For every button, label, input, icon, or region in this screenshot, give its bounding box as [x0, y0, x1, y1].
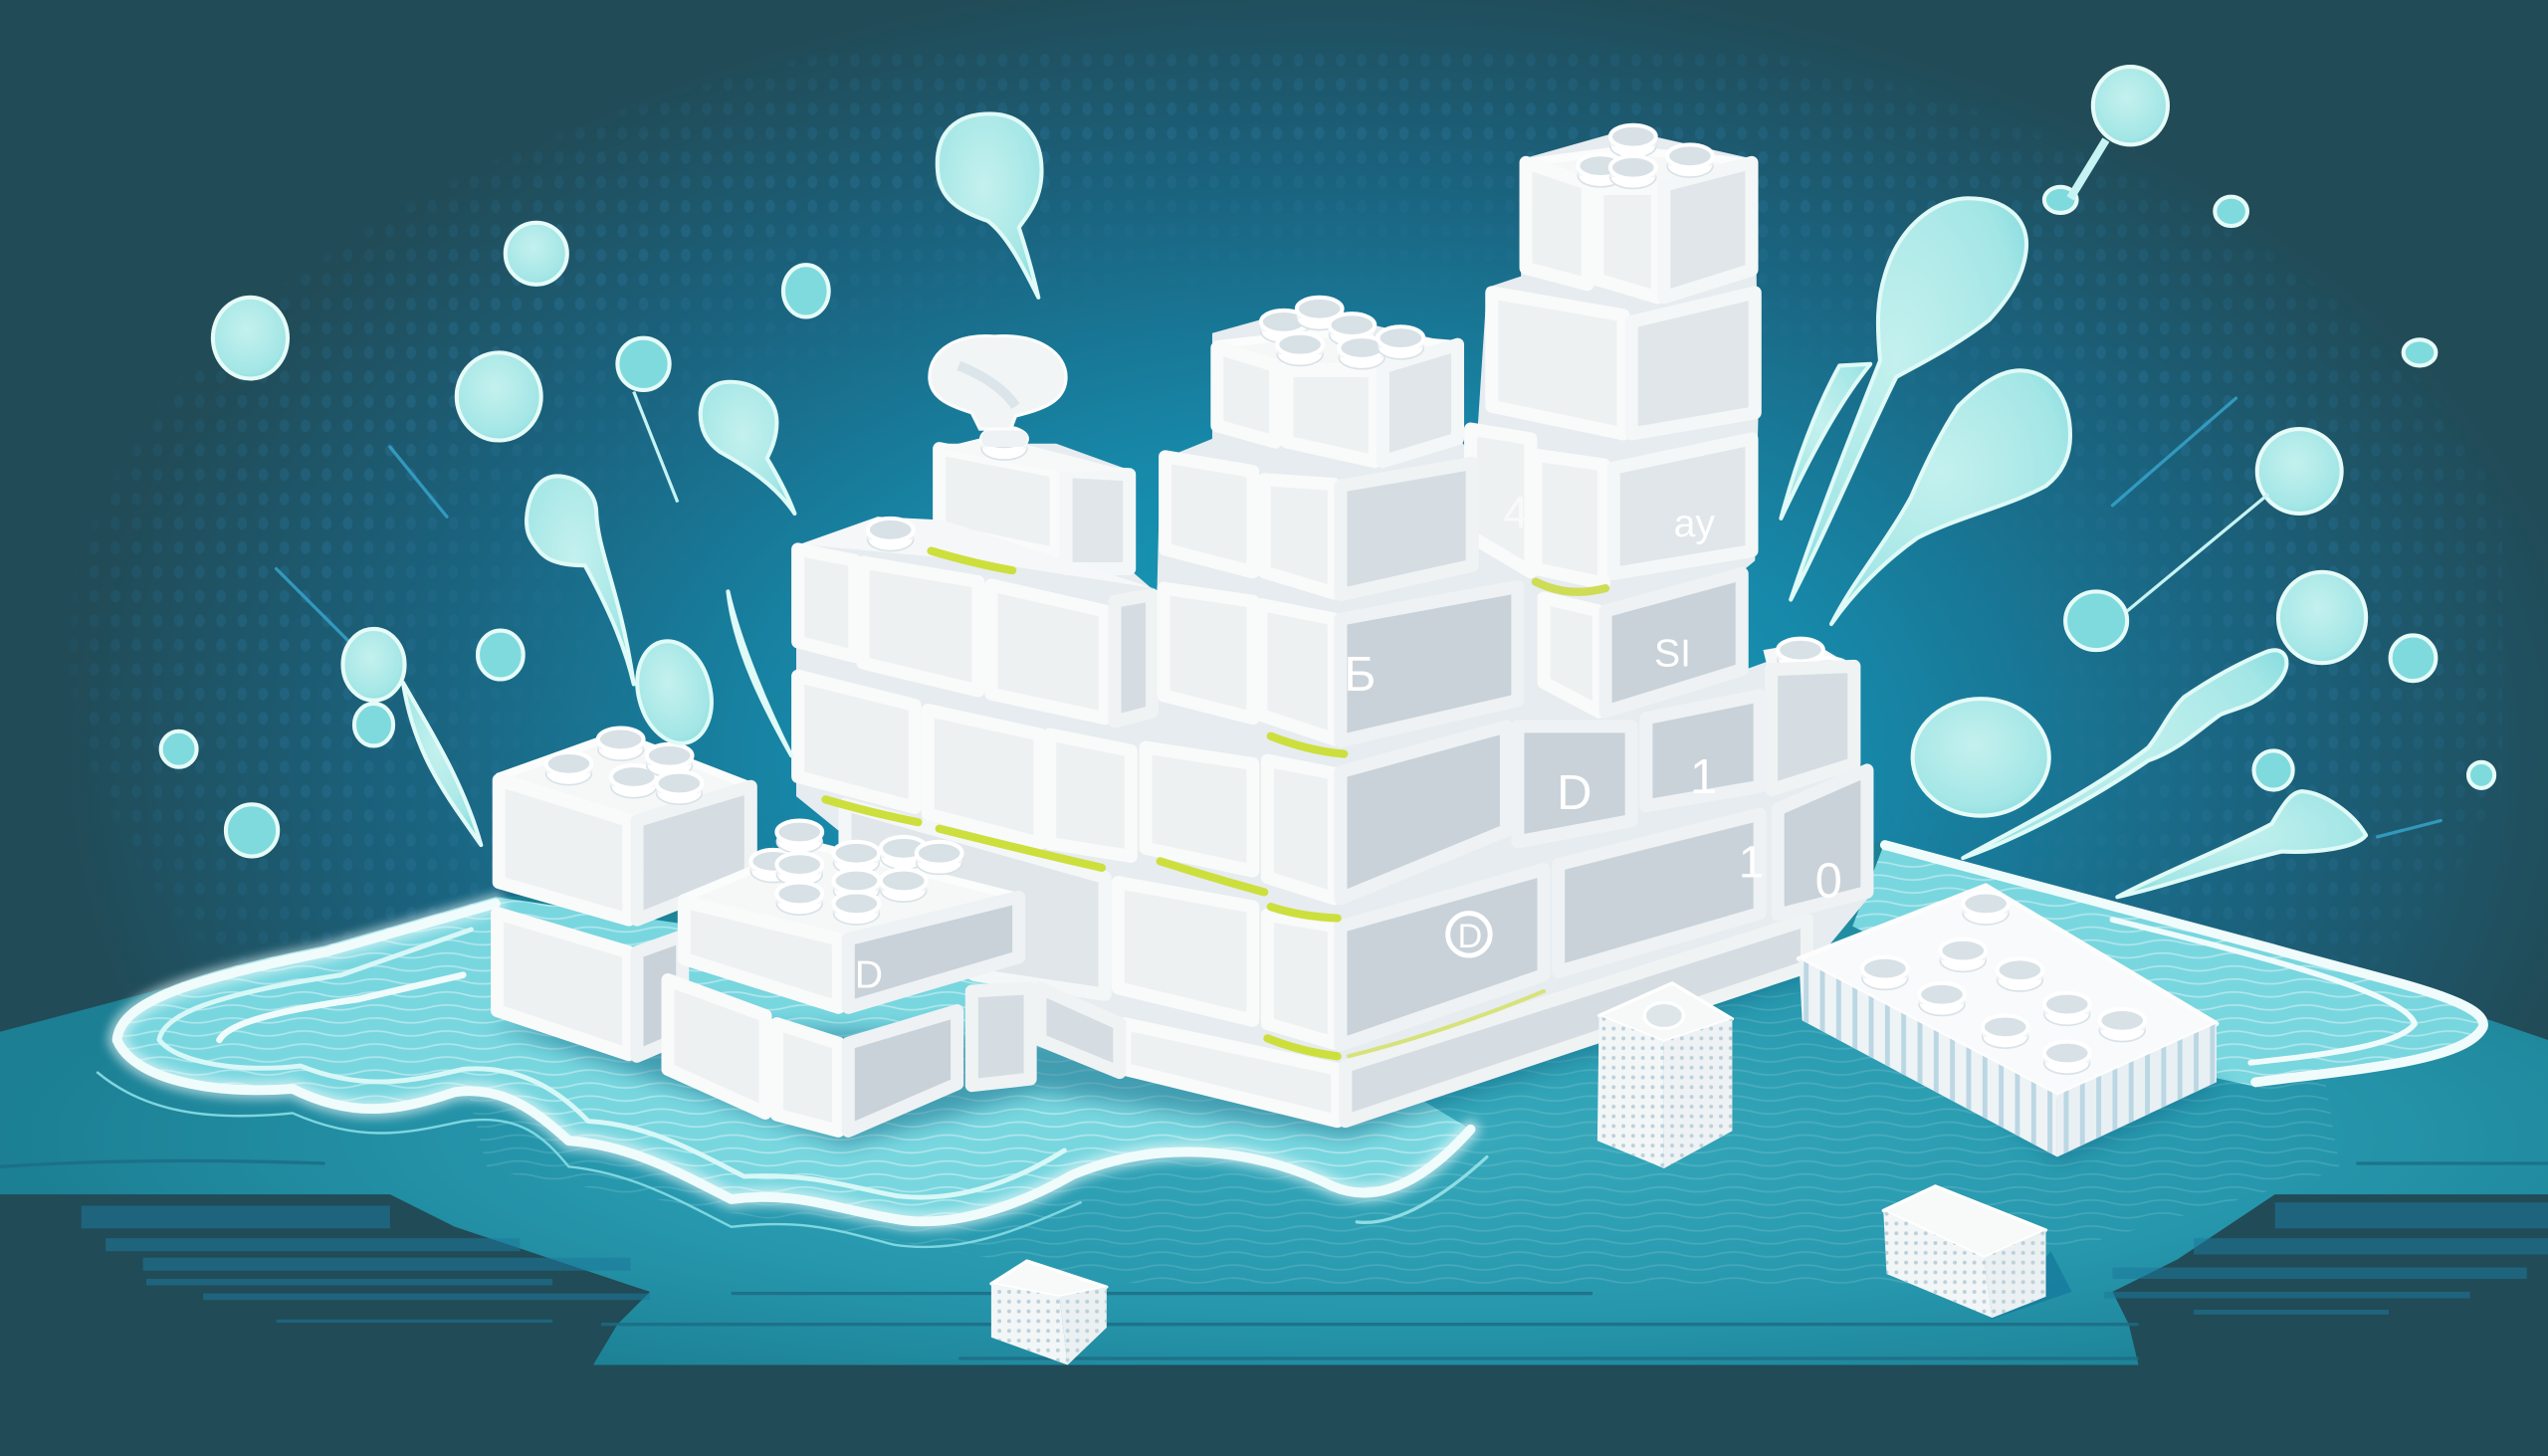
top surface studs: back right brick [1763, 639, 1852, 691]
brick: row three corner [1267, 870, 1544, 1045]
background light rays [277, 398, 2441, 837]
brick: centre third: Б [1344, 648, 1376, 702]
brick: row three right long [1559, 814, 1764, 971]
brick: front stack lower [668, 980, 1030, 1131]
brick: side back right [1772, 666, 1854, 790]
ground dark scratch lines [0, 1160, 2548, 1358]
ground dark streak blocks [82, 1202, 2548, 1323]
brick: small top left [940, 427, 1130, 569]
brick: row three end [1778, 770, 1867, 915]
brick: row three end: 0 [1815, 854, 1842, 908]
ground: teal water plane [0, 842, 2548, 1365]
yellow-green mortar lines [825, 551, 1544, 1056]
brick: left connector behind front stack [845, 804, 1105, 994]
brick: centre fourth [1267, 727, 1506, 899]
shadow: small brick lower right [1991, 1251, 2072, 1320]
brick: upper left row 2 [798, 676, 1253, 871]
brick: tower fourth [1544, 573, 1742, 712]
water: right pool [1852, 842, 2486, 1086]
brick: tower top [1526, 125, 1752, 298]
brick: row three corner: D [1457, 918, 1482, 955]
ground wave hatch [455, 975, 2340, 1284]
yellow-green mortar strip: tower [1536, 582, 1605, 592]
brick: tower second [1492, 293, 1755, 434]
water ripples [98, 845, 2483, 1247]
small knot piece on top [930, 336, 1066, 447]
small brick lower right [1883, 1186, 2046, 1318]
thin connecting lines between bubbles [634, 139, 2268, 611]
brick: tower fourth: SI [1654, 632, 1691, 675]
water wave hatch [113, 842, 2486, 1225]
brick: centre second [1166, 457, 1472, 595]
brick: base plinth [1040, 920, 1807, 1122]
brick wall backing [796, 130, 1870, 1127]
brick: wall middle right pair [1518, 696, 1760, 842]
brick: far left lower [498, 914, 683, 1056]
brick: centre third [1164, 586, 1518, 741]
brick: tower third: ay [1674, 503, 1715, 545]
water rim glow [117, 904, 1471, 1221]
brick: upper left row [798, 517, 1154, 722]
floating droplets with tails [403, 113, 2366, 897]
right flat studded plate [1799, 886, 2217, 1157]
small brick lower centre [991, 1261, 1107, 1365]
brick: wall middle right pair: 1 [1690, 750, 1717, 804]
background dot pattern [65, 49, 2502, 1007]
brick: wall middle right pair: D [1557, 766, 1592, 820]
bricks: shadow under stack [488, 942, 2227, 1163]
brick: far left upper [499, 728, 752, 920]
brick: tower third: 4 [1503, 488, 1529, 538]
brick: row three left face [1118, 883, 1253, 1020]
water: left pool [113, 897, 1471, 1225]
small textured cube [1597, 983, 1732, 1168]
brick: front stack upper: D [855, 954, 883, 997]
floating bubbles [161, 67, 2494, 856]
brick: front stack upper [683, 821, 1019, 1007]
brick: tower third [1471, 429, 1752, 583]
brick: row three right long: 1 [1739, 837, 1764, 888]
brick: centre top [1217, 298, 1457, 462]
background glow [0, 0, 2548, 1040]
